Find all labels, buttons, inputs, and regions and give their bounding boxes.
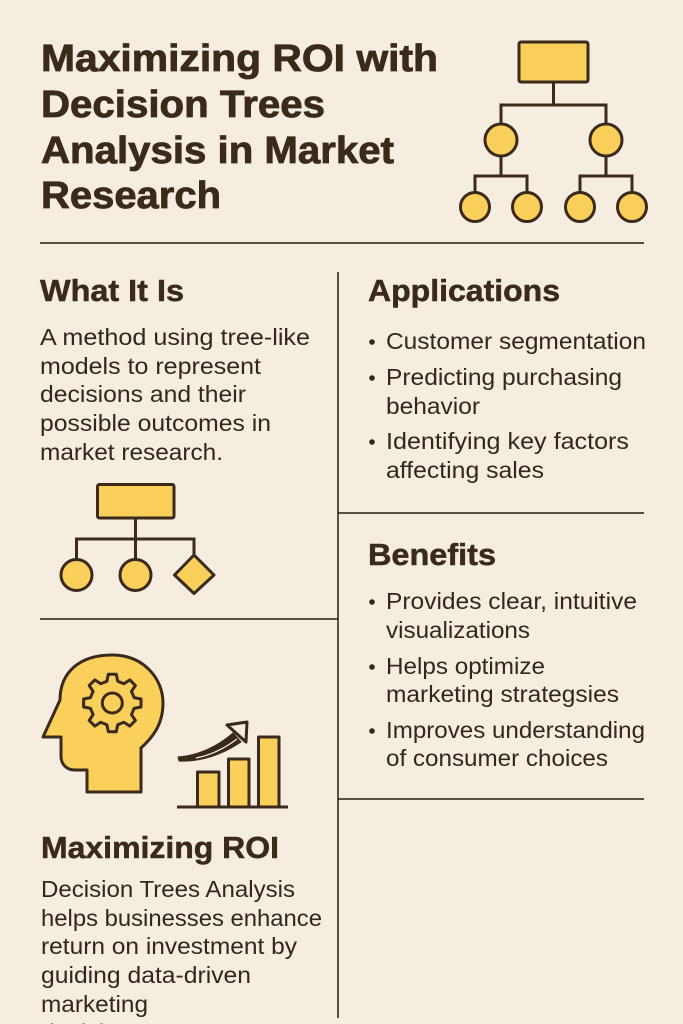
list: applications [369, 328, 646, 483]
text: what it is description: possible outcomes in [40, 410, 271, 436]
heading: maximizing roi: Maximizing ROI [41, 830, 279, 865]
list: benefits: Helps optimize [386, 653, 545, 679]
list: benefits: Improves understanding [386, 717, 645, 743]
text: what it is description: models to represent [40, 353, 262, 379]
icon: head with gear [43, 655, 163, 792]
panel: what it is [40, 273, 310, 594]
heading: what it is: What It Is [40, 273, 184, 308]
list: applications: Identifying key factors [386, 428, 629, 454]
text: what it is description: A method using tree-like [40, 324, 310, 350]
text: what it is description: decisions and their [40, 381, 246, 407]
list: benefits: visualizations [386, 617, 530, 643]
list: benefits: marketing strategsies [386, 681, 619, 707]
text: maximizing roi description: marketing [41, 991, 148, 1017]
title: Maximizing ROI with [41, 38, 438, 80]
list: applications: Predicting purchasing [386, 364, 622, 390]
icon: decision tree header [460, 42, 646, 222]
text: maximizing roi description [41, 876, 322, 1024]
text: what it is description: market research. [40, 439, 223, 465]
text: maximizing roi description: return on investment by [41, 933, 298, 959]
title: Decision Trees [41, 84, 325, 126]
text: maximizing roi description: helps businesses enhance [41, 905, 322, 931]
list: applications: behavior [386, 393, 480, 419]
panel: maximizing roi [41, 655, 322, 1024]
panel: applications [368, 273, 646, 483]
list: benefits: Provides clear, intuitive [386, 588, 637, 614]
list: applications: Customer segmentation [386, 328, 646, 354]
panel: benefits [368, 537, 645, 771]
text: maximizing roi description: Decision Trees Analysis [41, 876, 295, 902]
title: Analysis in Market [41, 130, 394, 172]
icon: rising bar chart with arrow [177, 722, 288, 807]
text: maximizing roi description: guiding data-driven [41, 962, 251, 988]
icon: small decision tree [61, 484, 214, 594]
title [41, 38, 438, 217]
title: Research [41, 175, 221, 217]
heading: applications: Applications [368, 273, 560, 308]
text: what it is description [40, 324, 310, 465]
list: benefits [369, 588, 645, 771]
list: benefits: of consumer choices [386, 745, 608, 771]
heading: benefits: Benefits [368, 537, 496, 572]
list: applications: affecting sales [386, 457, 544, 483]
